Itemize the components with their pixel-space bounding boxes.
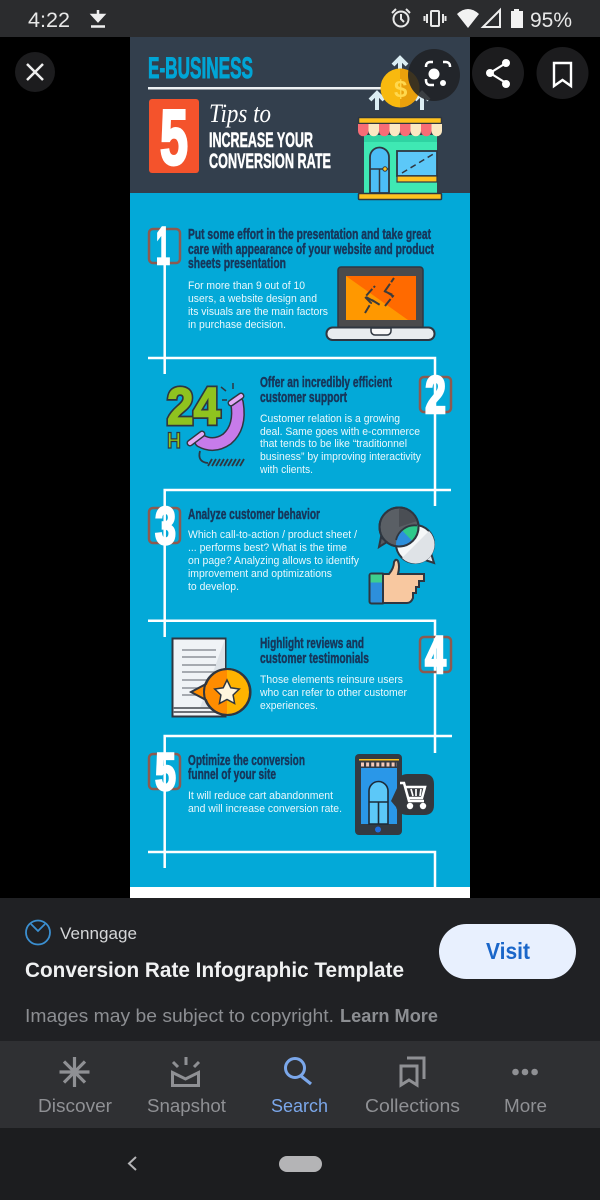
source name: Venngage — [60, 924, 137, 943]
step 4 heading: customer testimonials — [260, 651, 369, 667]
arrows — [370, 58, 429, 110]
icon: signal — [483, 10, 500, 27]
step 1 text: in purchase decision. — [188, 319, 286, 331]
step 5 text: It will reduce cart abandonment — [188, 790, 334, 802]
close button — [15, 52, 55, 92]
step 2 heading — [260, 375, 392, 406]
icon: download — [91, 10, 105, 26]
tab: collections — [365, 1058, 460, 1116]
coin — [380, 68, 420, 108]
step 3 text: Which call-to-action / product sheet / — [188, 529, 358, 541]
icon: document with star — [172, 638, 251, 716]
tab: snapshot — [147, 1057, 226, 1116]
status bar — [0, 0, 600, 37]
tab: more — [504, 1069, 547, 1116]
red badge with 5: 5 — [160, 93, 188, 181]
icon: alarm — [392, 9, 410, 26]
icon: chat bubbles — [379, 508, 440, 564]
tab: search: Search — [271, 1096, 328, 1116]
step 2 text: business” by improving interactivity — [260, 451, 421, 463]
android navigation bar — [0, 1128, 600, 1200]
step 1 heading: Put some effort in the presentation and take great — [188, 227, 431, 243]
number 1: 1 — [156, 217, 170, 276]
tab: snapshot: Snapshot — [147, 1096, 226, 1116]
step 1 text — [188, 280, 328, 331]
step 5 heading — [188, 753, 305, 783]
venngage logo — [26, 920, 50, 944]
copyright note: Learn More — [340, 1006, 438, 1026]
bottom tab bar — [0, 1041, 600, 1128]
header rule — [148, 87, 388, 90]
home pill — [279, 1156, 322, 1172]
source info panel — [0, 898, 600, 1041]
step 1 heading — [188, 227, 434, 272]
step 1 heading: sheets presentation — [188, 256, 286, 272]
main blue panel — [130, 193, 470, 887]
icon: vibrate — [424, 11, 446, 26]
icon: shopping cart bubble — [391, 774, 434, 815]
step 4 text: Those elements reinsure users — [260, 674, 403, 686]
awning — [358, 118, 442, 124]
number 1 — [149, 217, 180, 276]
bookmark button — [536, 47, 588, 99]
title: E-BUSINESS: E-BUSINESS — [148, 52, 253, 85]
step 1 text: users, a website design and — [188, 293, 317, 305]
step 3 heading: Analyze customer behavior — [188, 507, 320, 523]
step 5 heading: funnel of your site — [188, 767, 276, 783]
battery percent: 95% — [530, 9, 572, 32]
step 2 text: with clients. — [259, 464, 313, 476]
step 5 text — [188, 790, 342, 815]
step 3 text: on page? Analyzing allows to identify — [188, 555, 359, 567]
step 2 text: that tends to be like “traditionnel — [260, 438, 407, 450]
step 5 text: and will increase conversion rate. — [188, 803, 342, 815]
step 4 — [172, 626, 451, 716]
step 3 text: improvement and optimizations — [188, 568, 332, 580]
heading: increase your: INCREASE YOUR — [209, 129, 313, 152]
icon: store with coin: $ — [394, 76, 408, 103]
number 2: 2 — [425, 366, 446, 425]
heading: conversion rate: CONVERSION RATE — [209, 150, 331, 173]
tab: discover — [38, 1057, 112, 1116]
number 4: 4 — [425, 626, 446, 685]
infographic header panel — [130, 37, 470, 194]
step 1 text: its visuals are the main factors — [188, 306, 328, 318]
page title: Conversion Rate Infographic Template — [25, 959, 404, 982]
icon: 24H phone: H — [167, 428, 181, 453]
back chevron — [129, 1157, 136, 1170]
number 5: 5 — [155, 743, 176, 802]
icon: 24H phone: 24 — [167, 378, 220, 436]
tab: search — [271, 1058, 328, 1116]
visit button — [439, 924, 576, 979]
step 2 — [167, 366, 451, 476]
step 5 — [149, 743, 434, 835]
visit button: Visit — [486, 938, 530, 964]
step 1 — [149, 217, 434, 340]
store body — [364, 135, 437, 194]
step 2 heading: Offer an incredibly efficient — [260, 375, 392, 391]
icon: phone storefront — [355, 754, 402, 835]
connector lines — [148, 262, 452, 887]
tab: collections: Collections — [365, 1096, 460, 1116]
icon: battery — [511, 9, 523, 28]
icon: thumbs up — [370, 560, 424, 604]
step 4 text: who can refer to other customer — [259, 687, 407, 699]
step 3 text: ... performs best? What is the time — [188, 542, 347, 554]
icon: store with coin — [358, 58, 442, 200]
number 3: 3 — [155, 497, 176, 556]
step 2 text: deal. Same goes with e-commerce — [260, 426, 420, 438]
step 2 text: Customer relation is a growing — [260, 413, 400, 425]
step 4 text: experiences. — [260, 700, 318, 712]
lens button — [408, 49, 460, 101]
white footer strip — [130, 887, 470, 898]
step 5 heading: Optimize the conversion — [188, 753, 305, 769]
heading: tips to: Tips to — [209, 99, 271, 128]
copyright note — [25, 1006, 438, 1026]
step 1 heading: care with appearance of your website and product — [188, 242, 434, 258]
door — [370, 148, 389, 193]
share button — [472, 47, 524, 99]
clock: 4:22 — [28, 9, 70, 32]
icon: wifi — [457, 9, 479, 28]
icon: laptop — [326, 267, 434, 340]
step 4 text — [259, 674, 407, 712]
step 2 heading: customer support — [260, 390, 347, 406]
copyright note: Images may be subject to copyright. — [25, 1006, 334, 1026]
store base — [358, 194, 442, 200]
tab: more: More — [504, 1096, 547, 1116]
step 3 — [149, 497, 440, 604]
step 4 heading — [260, 636, 369, 667]
step 2 text — [259, 413, 421, 476]
step 1 text: For more than 9 out of 10 — [188, 280, 305, 292]
icon: 24H phone — [167, 378, 244, 466]
step 4 heading: Highlight reviews and — [260, 636, 364, 652]
icon: 24H phone: 24 — [167, 378, 220, 436]
window — [397, 151, 437, 176]
step 3 text: to develop. — [188, 581, 239, 593]
tab: discover: Discover — [38, 1096, 112, 1116]
step 3 text — [188, 529, 359, 593]
